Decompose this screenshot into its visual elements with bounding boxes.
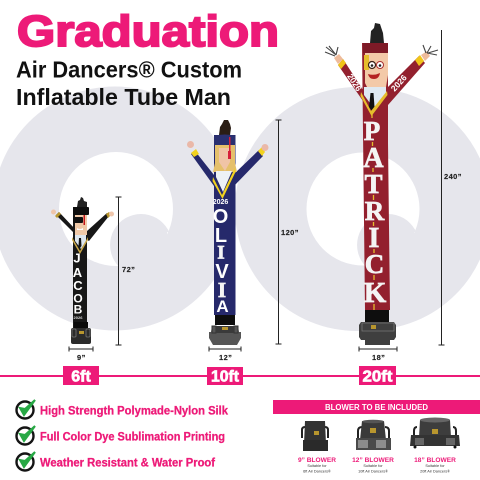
size badge: 20ft: 20ft (362, 368, 393, 386)
tube man: Olivia 10ft: A (216, 297, 229, 316)
tube man: Olivia 10ft: I (218, 278, 226, 302)
icon: check 2 (16, 426, 35, 444)
size badge: 20ft (359, 366, 396, 386)
tube man: Patrick 20ft (325, 23, 438, 345)
tube man: Patrick 20ft: P (364, 116, 380, 146)
blower: 12 inch: 10ft Air Dancers® (358, 470, 388, 474)
blower: 18 inch: 20ft Air Dancers® (420, 470, 450, 474)
size rule (0, 375, 480, 377)
dimension labels: 120” (281, 228, 299, 237)
feature 2: Full Color Dye Sublimation Printing (40, 430, 225, 444)
dimension labels: 9” (77, 353, 86, 362)
tube man: Jacob 6ft: J (73, 250, 81, 266)
blower: 12 inch: 12” BLOWER (352, 457, 394, 464)
tube man: Patrick 20ft: R (365, 196, 385, 226)
tube man: Olivia 10ft: O (213, 206, 228, 228)
tube man: Patrick 20ft: A (363, 143, 384, 174)
blower: 9 inch: 9” BLOWER (298, 457, 336, 464)
subtitle: Air Dancers® Custom (16, 56, 242, 82)
tube man: Jacob 6ft: B (74, 302, 83, 316)
dimension labels (77, 172, 462, 362)
tube man: Patrick 20ft: K (364, 277, 387, 309)
tube man: Jacob 6ft: A (73, 265, 83, 280)
icon: check 1 (16, 400, 35, 418)
blower banner: BLOWER TO BE INCLUDED (325, 403, 428, 412)
size badge: 10ft: 10ft (211, 368, 240, 386)
tube man: Olivia 10ft (187, 120, 268, 345)
tube man: Olivia 10ft: V (215, 261, 229, 283)
blower: 12 inch: Suitable for (363, 464, 383, 468)
size badge: 6ft (63, 366, 99, 386)
tube man: Patrick 20ft: C (365, 249, 384, 279)
dimension labels: 240” (444, 172, 462, 181)
blower: 18 inch (410, 418, 460, 474)
blower: 9 inch: 6ft Air Dancers® (303, 470, 331, 474)
tube man: Patrick 20ft: T (364, 169, 383, 199)
tube man: Jacob 6ft: O (73, 292, 83, 306)
subtitle (16, 56, 242, 110)
dimension labels: 18” (372, 353, 385, 362)
icon: check 3 (16, 452, 35, 470)
tube man: Jacob 6ft: 2026 (74, 315, 83, 320)
tube man: Olivia 10ft: L (215, 225, 227, 247)
tube man: Patrick 20ft: I (369, 223, 379, 254)
dimension labels: 72” (122, 265, 135, 274)
blower banner (273, 400, 480, 414)
subtitle: Inflatable Tube Man (16, 84, 231, 110)
dimension lines (69, 30, 444, 352)
tube man: Jacob 6ft (51, 197, 114, 344)
feature 1: High Strength Polymade-Nylon Silk (40, 404, 228, 418)
feature 3: Weather Resistant & Water Proof (40, 456, 216, 470)
tube man: Olivia 10ft: I (217, 242, 225, 264)
blower: 9 inch: Suitable for (307, 464, 327, 468)
blower: 18 inch: Suitable for (425, 464, 445, 468)
blower: 9 inch (298, 421, 336, 474)
tube man: Patrick 20ft: 2026 (345, 72, 364, 93)
size badge: 6ft: 6ft (71, 368, 91, 386)
title: Graduation (17, 7, 279, 56)
blower: 12 inch (352, 420, 394, 474)
dimension labels: 12” (219, 353, 232, 362)
blower: 18 inch: 18” BLOWER (414, 457, 456, 464)
tube man: Patrick 20ft: 2026 (389, 72, 409, 93)
feature list (16, 400, 228, 470)
tube man: Olivia 10ft: 2026 (213, 199, 228, 206)
tube man: Jacob 6ft: C (73, 278, 83, 293)
